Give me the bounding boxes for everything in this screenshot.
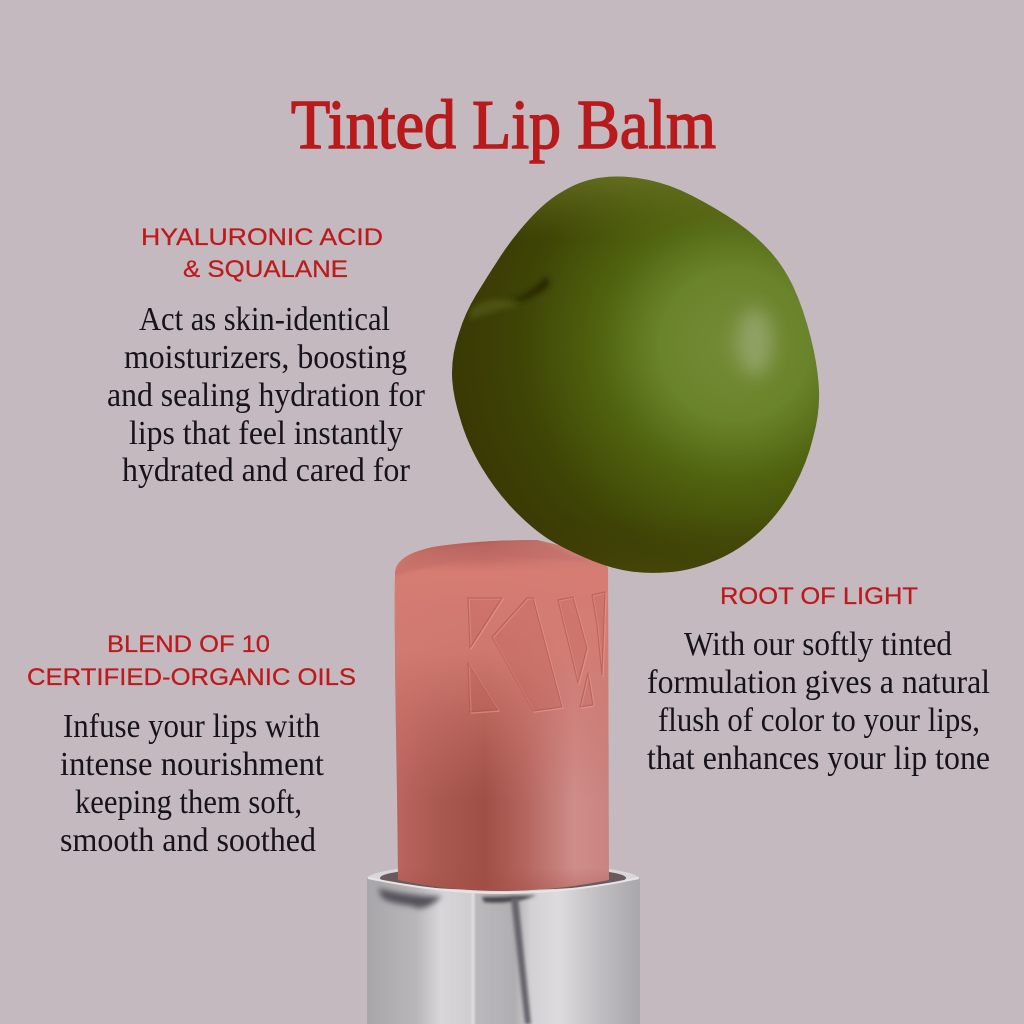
text block: hyaluronic acid description: hydrated and cared for: [122, 452, 411, 489]
text block: hyaluronic acid description: lips that feel instantly: [129, 415, 403, 452]
icon: stem dimple: [512, 276, 549, 301]
lipstick balm bullet: [390, 535, 615, 905]
text block: oils description: intense nourishment: [60, 746, 325, 783]
heading: blend of 10 certified-organic oils: CERTIFIED-ORGANIC OILS: [27, 664, 356, 691]
text block: oils description: Infuse your lips with: [63, 708, 320, 745]
heading: hyaluronic acid and squalane: & SQUALANE: [183, 256, 348, 283]
text block: root of light description: With our softly tinted: [684, 626, 952, 663]
icon: embossed KW logo: [468, 592, 606, 713]
text block: root of light description: flush of color to your lips,: [658, 702, 980, 739]
text block: oils description: smooth and soothed: [60, 822, 316, 859]
heading: root of light: ROOT OF LIGHT: [720, 583, 918, 610]
lipstick silver tube body: [367, 878, 640, 1024]
panel: root of light: [647, 583, 990, 777]
lipstick tube rim: [367, 863, 639, 895]
text block: oils description: [60, 708, 325, 859]
text block: root of light description: [647, 626, 990, 777]
text block: oils description: keeping them soft,: [75, 784, 302, 821]
panel: hyaluronic acid and squalane: [107, 224, 426, 489]
heading: hyaluronic acid and squalane: HYALURONIC ACID: [141, 224, 383, 251]
title: Tinted Lip Balm: [291, 87, 716, 164]
heading: hyaluronic acid and squalane: [141, 224, 383, 283]
heading: blend of 10 certified-organic oils: [27, 631, 356, 691]
panel: blend of organic oils: [27, 631, 356, 859]
text block: hyaluronic acid description: moisturizers, boosting: [124, 339, 407, 376]
text block: root of light description: formulation gives a natural: [647, 664, 990, 701]
text block: root of light description: that enhances your lip tone: [647, 740, 990, 777]
heading: blend of 10 certified-organic oils: BLEND OF 10: [107, 631, 270, 658]
highlight: [737, 308, 773, 376]
plum fruit: [445, 170, 825, 580]
text block: hyaluronic acid description: and sealing hydration for: [107, 377, 426, 414]
text block: hyaluronic acid description: Act as skin-identical: [139, 301, 390, 338]
text block: hyaluronic acid description: [107, 301, 426, 489]
